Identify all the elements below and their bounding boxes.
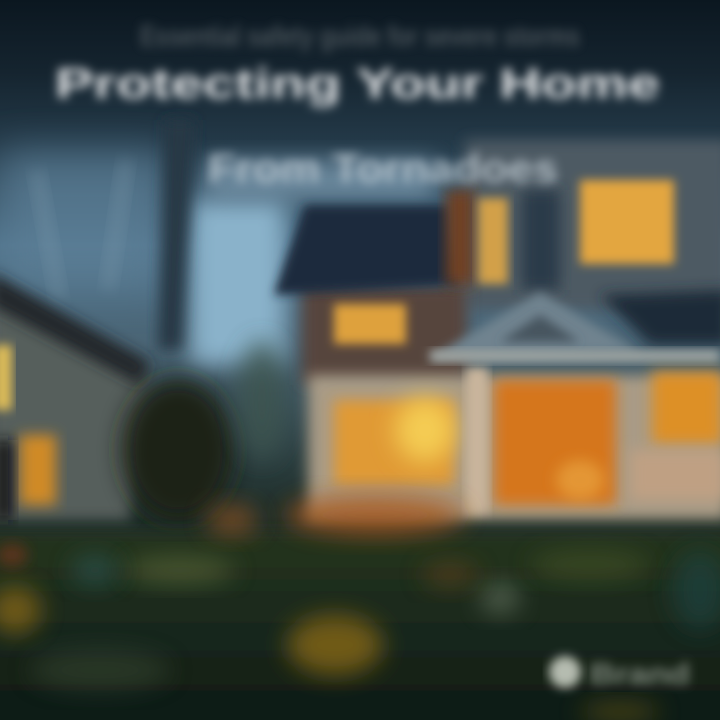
window: upper middle (478, 198, 508, 284)
garden (0, 495, 720, 720)
logo mark (549, 656, 581, 688)
house: ground floor wall (308, 375, 720, 520)
title block (55, 20, 660, 191)
house: dark blue roof (274, 205, 460, 295)
porch column (466, 368, 488, 513)
small background tree (238, 340, 286, 460)
house: chimney (446, 190, 474, 285)
house: upper left wall (302, 285, 467, 385)
house: porch beam (430, 350, 720, 362)
dark tree (122, 378, 234, 522)
neighbouring house on the left (0, 272, 150, 520)
logo badge (549, 656, 690, 691)
window: upper right (580, 180, 674, 264)
house: dark tower (522, 190, 560, 290)
house: right roof (600, 290, 720, 345)
logo wordmark: Brand (590, 658, 690, 691)
house: upper right wall (465, 140, 720, 310)
window: ground left (334, 400, 454, 485)
door: centre glow (494, 380, 616, 505)
window: small left (334, 304, 406, 344)
overline text: Essential safety guide for severe storms (140, 20, 580, 53)
main house (274, 140, 720, 520)
sub heading: From Tornadoes (208, 147, 558, 191)
main heading: Protecting Your Home (55, 60, 660, 108)
window: ground right (652, 372, 720, 444)
house: porch roof (430, 292, 640, 358)
tornado funnel (158, 120, 195, 350)
